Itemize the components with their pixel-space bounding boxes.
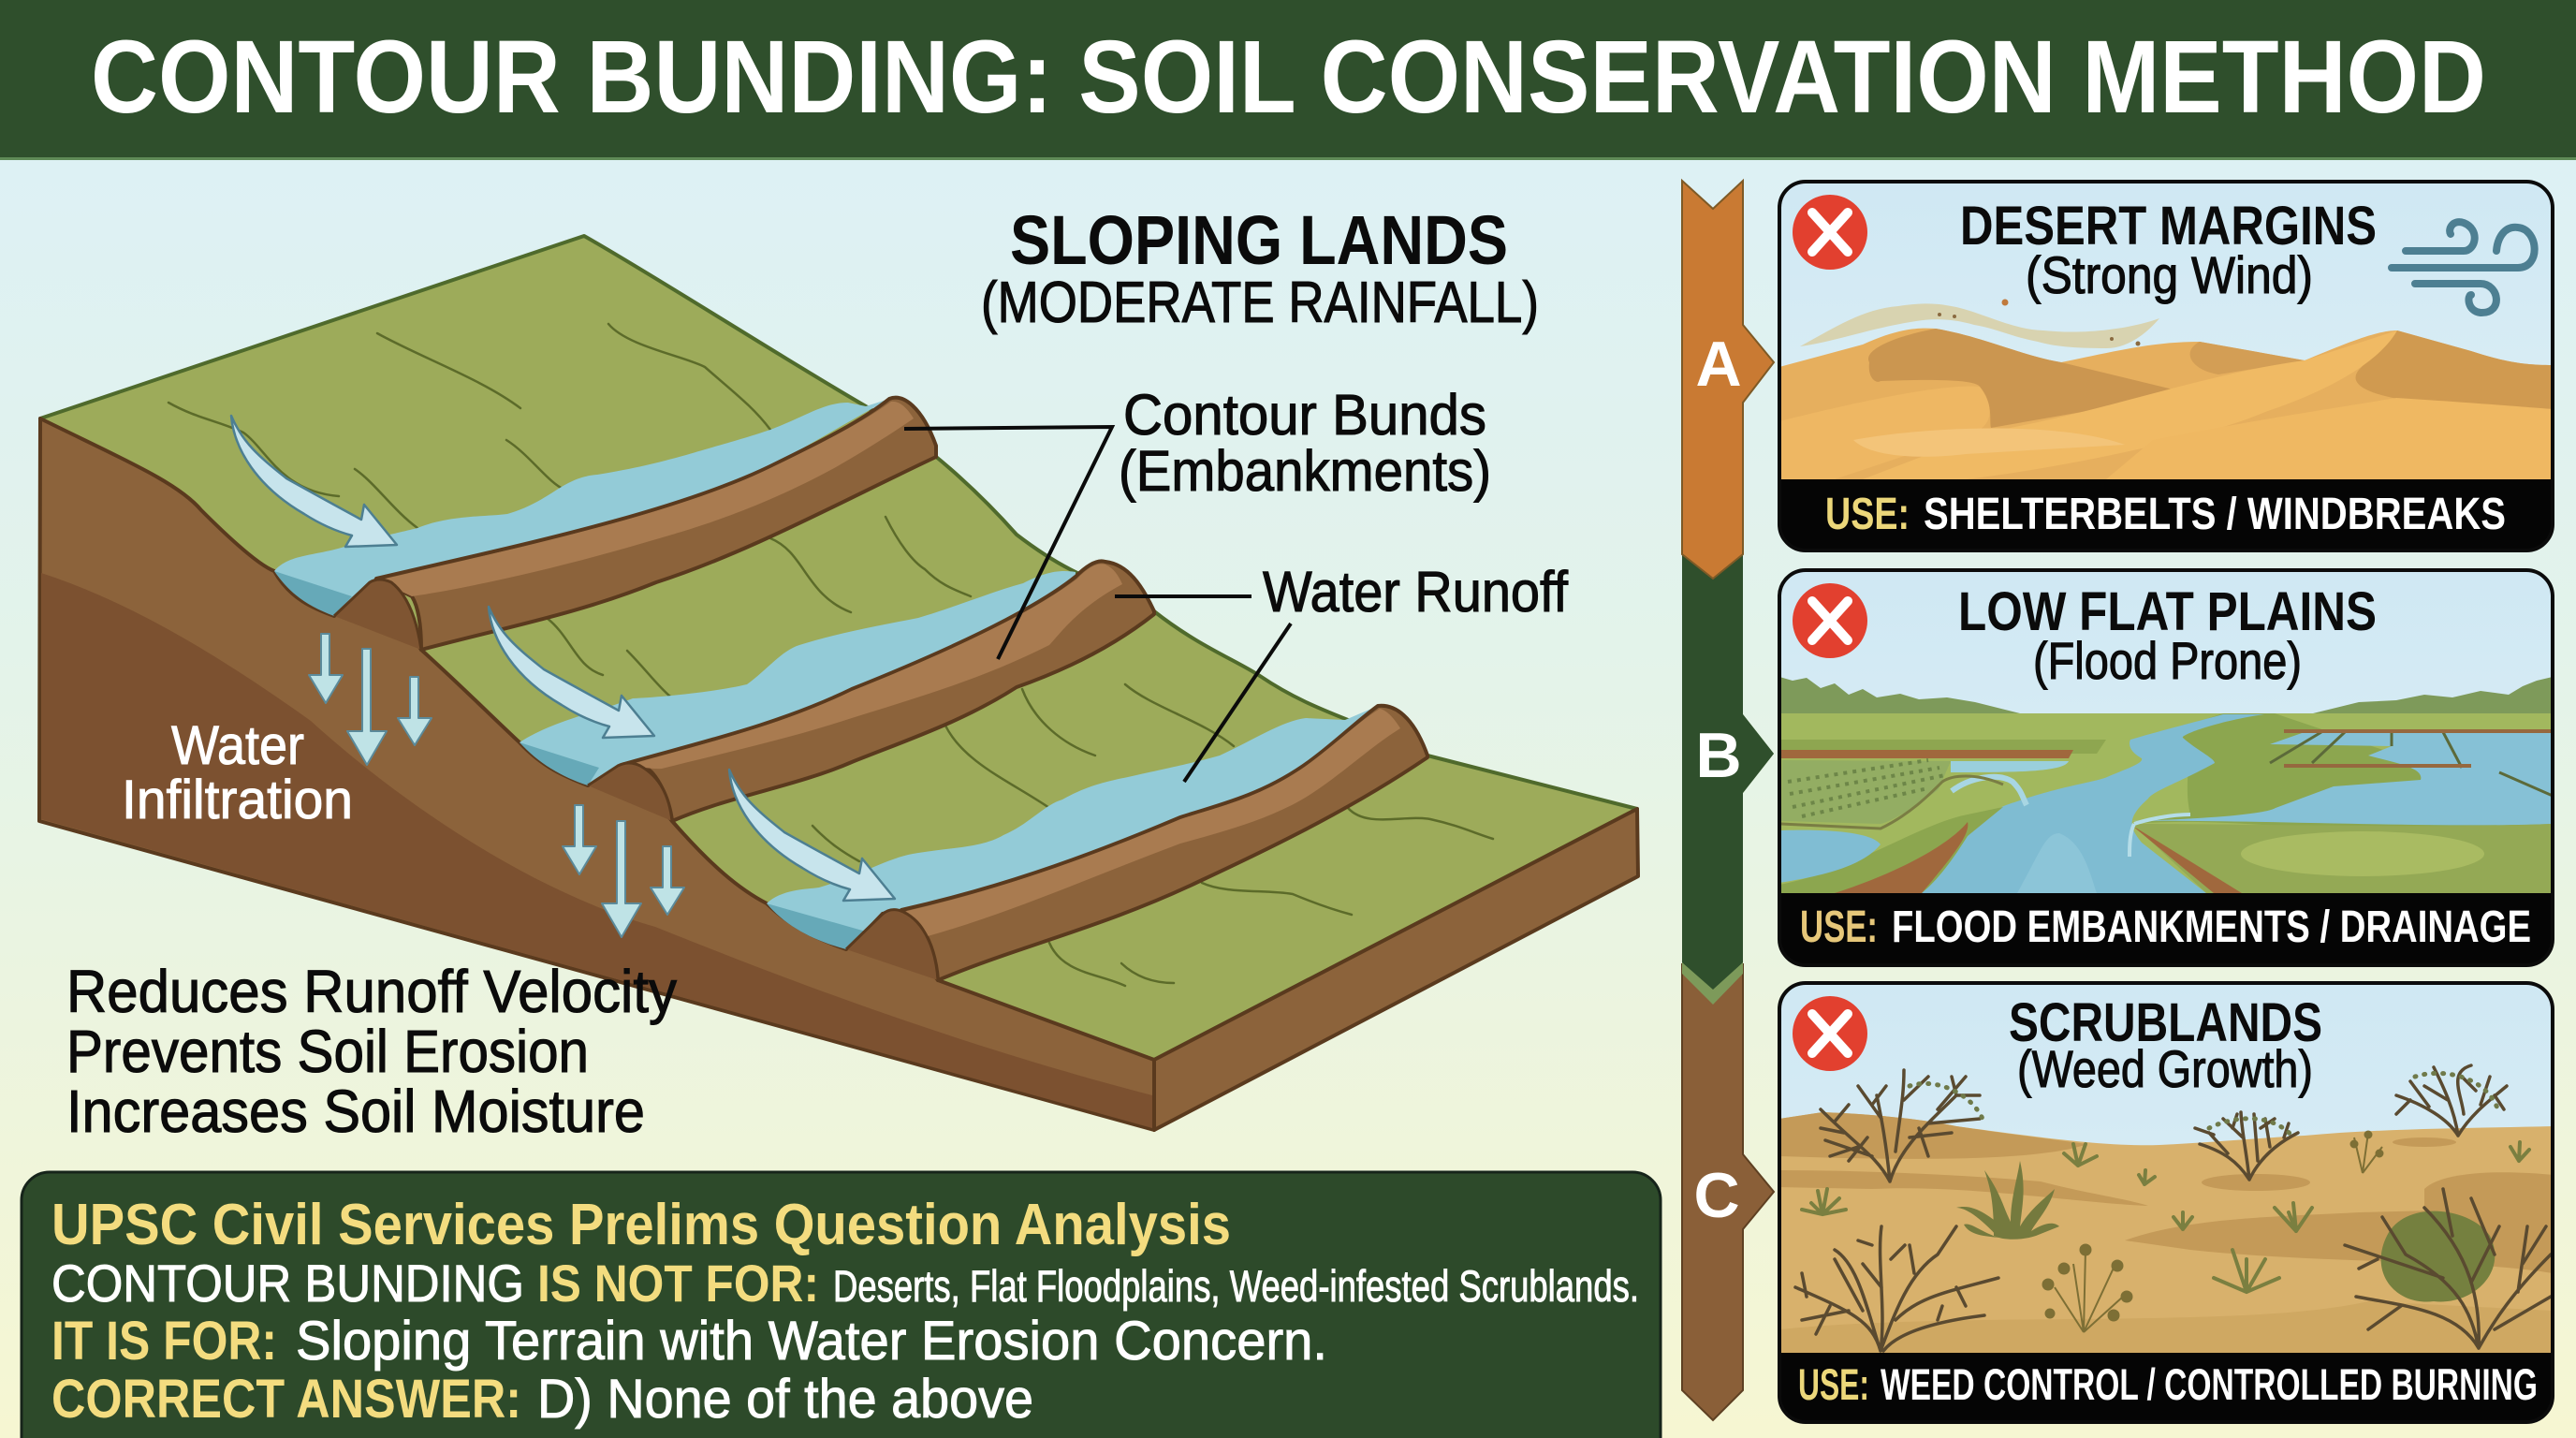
card: desert margins [1779, 182, 2553, 550]
line: correct answer: CORRECT ANSWER: [51, 1369, 521, 1430]
contour bund 2 [588, 561, 1154, 821]
line: is not for: CONTOUR BUNDING [51, 1254, 524, 1313]
water channel 2 [520, 571, 1076, 785]
footer: use flood embankments: USE: [1800, 902, 1878, 952]
card: low flat plains [1779, 570, 2553, 965]
card heading [1958, 581, 2377, 690]
infiltration arrows lower [563, 805, 684, 937]
benefits list: Increases Soil Moisture [66, 1078, 645, 1145]
leader lines [904, 427, 1291, 782]
panel: question analysis [22, 1172, 1661, 1438]
icon: red cross [1793, 195, 1867, 270]
line: is not for: Deserts, Flat Floodplains, Weed-infested Scrublands. [833, 1261, 1639, 1311]
header banner [0, 0, 2576, 160]
grasses [1802, 1142, 2529, 1292]
foliage [2381, 1211, 2495, 1301]
benefits list: Reduces Runoff Velocity [66, 958, 677, 1025]
ribbon B: B [1695, 720, 1742, 791]
heading: sloping lands: (MODERATE RAINFALL) [981, 271, 1539, 335]
ribbon B [1682, 548, 1774, 1005]
footer: use shelterbelts: USE: [1825, 490, 1910, 539]
benefits list [66, 958, 677, 1145]
heading: sloping lands: SLOPING LANDS [1010, 201, 1508, 279]
icon: wind [2392, 222, 2535, 313]
panel heading: UPSC Civil Services Prelims Question Analysis [51, 1193, 1231, 1257]
arrow: runoff flow 3 [729, 770, 895, 901]
ribbon A: A [1695, 329, 1742, 400]
label: contour bunds [1119, 383, 1491, 503]
agave weed [1956, 1161, 2059, 1240]
line: correct answer: D) None of the above [537, 1369, 1033, 1430]
soil cross-section [39, 418, 1154, 1130]
card heading: (Strong Wind) [2026, 245, 2313, 304]
footer: use weed control: USE: [1798, 1359, 1869, 1409]
line: correct answer [51, 1369, 1033, 1430]
label: water infiltration: Infiltration [122, 770, 353, 830]
shrubs [1795, 1065, 2551, 1351]
contour lines on slope [168, 324, 1493, 986]
line: is not for: IS NOT FOR: [537, 1254, 819, 1313]
contour bund 1 [334, 398, 936, 650]
icon: red cross [1793, 996, 1867, 1071]
card heading [1960, 196, 2377, 304]
floodplain illustration [1779, 677, 2553, 893]
line: it is for: Sloping Terrain with Water Erosion Concern. [296, 1311, 1327, 1372]
card heading: LOW FLAT PLAINS [1958, 581, 2377, 642]
label: contour bunds: Contour Bunds [1123, 383, 1486, 447]
card: scrublands [1779, 983, 2553, 1422]
arrow: runoff flow 2 [489, 607, 654, 738]
desert illustration [1779, 300, 2553, 479]
green slope surface [40, 236, 1637, 1060]
contour bund 3 [846, 706, 1427, 980]
footer: use shelterbelts [1779, 479, 2553, 550]
card heading: DESERT MARGINS [1960, 196, 2377, 257]
heading: sloping lands [981, 201, 1539, 335]
label: water infiltration [122, 715, 353, 830]
footer: use flood embankments [1779, 893, 2553, 965]
footer: use weed control [1779, 1353, 2553, 1422]
twig speckle [1910, 1073, 2499, 1137]
icon: red cross [1793, 583, 1867, 658]
line: is not for [51, 1254, 1639, 1313]
label: water infiltration: Water [171, 715, 304, 776]
benefits list: Prevents Soil Erosion [66, 1018, 589, 1085]
lower soil stratum [41, 573, 1152, 1128]
card heading [2009, 992, 2322, 1098]
terrain diagram [39, 236, 1638, 1130]
card heading: (Weed Growth) [2017, 1039, 2313, 1098]
arrow: runoff flow 1 [231, 416, 397, 547]
scrubland illustration [1779, 1065, 2553, 1353]
card heading: SCRUBLANDS [2009, 992, 2322, 1053]
front face of base [1154, 809, 1638, 1130]
ribbon C: C [1693, 1160, 1740, 1231]
infiltration arrows upper [309, 634, 432, 765]
flowering weeds [2042, 1131, 2383, 1332]
ribbon C [1682, 964, 1774, 1420]
card heading: (Flood Prone) [2033, 631, 2302, 690]
label: water runoff: Water Runoff [1263, 560, 1569, 624]
water channel 3 [767, 706, 1378, 949]
line: it is for: IT IS FOR: [51, 1311, 277, 1372]
ribbon A [1682, 181, 1774, 579]
label: contour bunds: (Embankments) [1119, 439, 1491, 503]
water channel 1 [274, 399, 889, 616]
